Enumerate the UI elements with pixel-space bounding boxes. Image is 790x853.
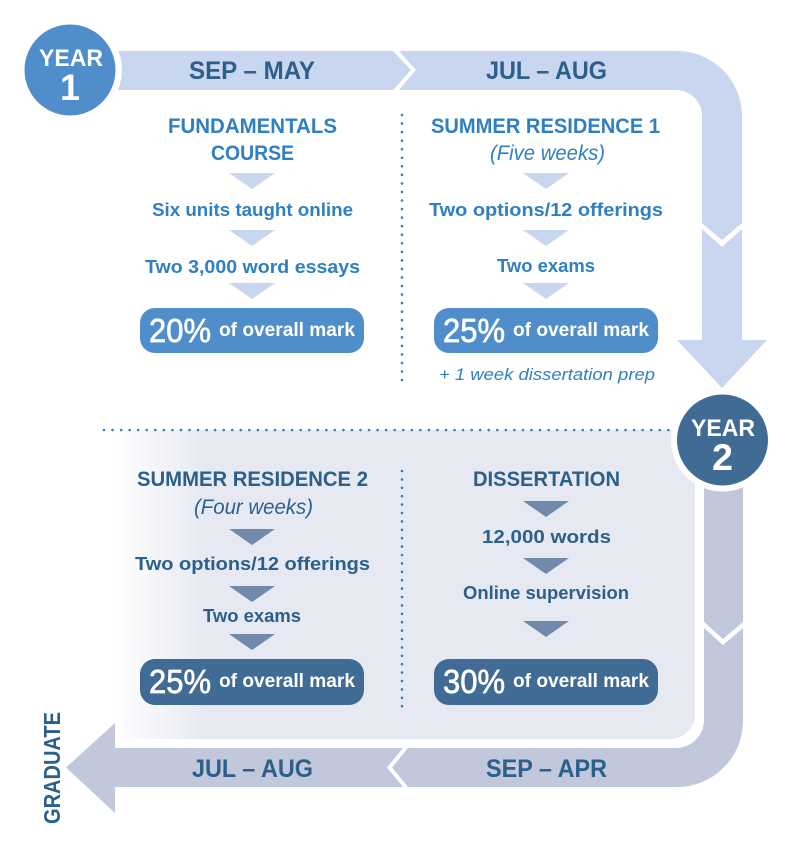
flow arrow: year 2 track <box>66 480 743 813</box>
arrow <box>523 501 569 517</box>
badge: year 2: 2 <box>712 437 733 478</box>
pill: 25 percent: 25% <box>149 663 211 700</box>
arrow <box>523 173 569 189</box>
label: Jul to Aug year 1: JUL – AUG <box>486 57 607 85</box>
flow arrow: year 1 track <box>100 51 767 388</box>
arrow <box>229 586 275 602</box>
badge: year 2: YEAR <box>691 415 755 442</box>
column: dissertation <box>434 468 658 705</box>
text: options: Two options/12 offerings <box>429 200 663 220</box>
segment: Sep to May <box>100 51 411 90</box>
arrow <box>523 558 569 574</box>
text: exams: Two exams <box>203 606 301 626</box>
panel: year 2 background <box>105 430 695 739</box>
text: word count: 12,000 words <box>482 527 611 547</box>
arrow <box>229 283 275 299</box>
pill: 25 percent: 25% <box>443 312 505 349</box>
subheading: five weeks: (Five weeks) <box>490 142 605 165</box>
subheading: four weeks: (Four weeks) <box>194 496 313 519</box>
text: six units: Six units taught online <box>152 200 353 220</box>
pill: 25 percent: of overall mark <box>513 320 649 341</box>
pill: 20 percent: 20% <box>149 312 211 349</box>
segment: Sep to Apr with corner <box>392 628 743 787</box>
arrow <box>229 173 275 189</box>
text: supervision: Online supervision <box>463 583 629 603</box>
pill: 20 percent: of overall mark <box>219 320 355 341</box>
pill: 20 percent <box>140 308 364 353</box>
heading: fundamentals course: FUNDAMENTALS <box>168 115 337 138</box>
heading: summer residence 1: SUMMER RESIDENCE 1 <box>431 115 660 138</box>
text: exams: Two exams <box>497 256 595 276</box>
column: fundamentals course: COURSE <box>211 142 294 165</box>
badge: year 1: YEAR <box>39 45 103 72</box>
pill: 25 percent: of overall mark <box>219 671 355 692</box>
heading: summer residence 2: SUMMER RESIDENCE 2 <box>137 468 368 491</box>
pill: 30 percent: of overall mark <box>513 671 649 692</box>
text: options: Two options/12 offerings <box>135 554 370 574</box>
heading: dissertation: DISSERTATION <box>473 468 620 491</box>
segment: Jul to Aug with corner <box>399 51 742 240</box>
arrow <box>229 230 275 246</box>
text: essays: Two 3,000 word essays <box>145 257 360 277</box>
column: summer residence 2 <box>135 468 370 705</box>
badge: year 1 <box>18 18 122 122</box>
pill: 30 percent: 30% <box>443 663 505 700</box>
arrow <box>229 634 275 650</box>
note: dissertation prep: + 1 week dissertation prep <box>439 365 655 384</box>
divider: horizontal between years <box>104 429 672 431</box>
label: Sep to May: SEP – MAY <box>189 57 315 85</box>
label: Sep to Apr: SEP – APR <box>486 755 607 783</box>
label: Jul to Aug year 2: JUL – AUG <box>192 755 313 783</box>
label: graduate: GRADUATE <box>39 712 65 824</box>
pill: 25 percent <box>434 308 658 353</box>
arrow <box>523 230 569 246</box>
column: summer residence 1 <box>429 115 663 384</box>
segment: below year 2 circle <box>704 480 743 639</box>
badge: year 2 <box>671 388 774 492</box>
pill: 30 percent <box>434 659 658 705</box>
badge: year 1: 1 <box>60 67 80 108</box>
arrow <box>523 621 569 637</box>
arrowhead: down to year 2 <box>677 229 767 388</box>
arrowhead: Jul to Aug toward graduate <box>66 723 403 813</box>
arrow <box>229 529 275 545</box>
arrow <box>523 283 569 299</box>
pill: 25 percent <box>140 659 364 705</box>
column: fundamentals course <box>140 115 364 353</box>
